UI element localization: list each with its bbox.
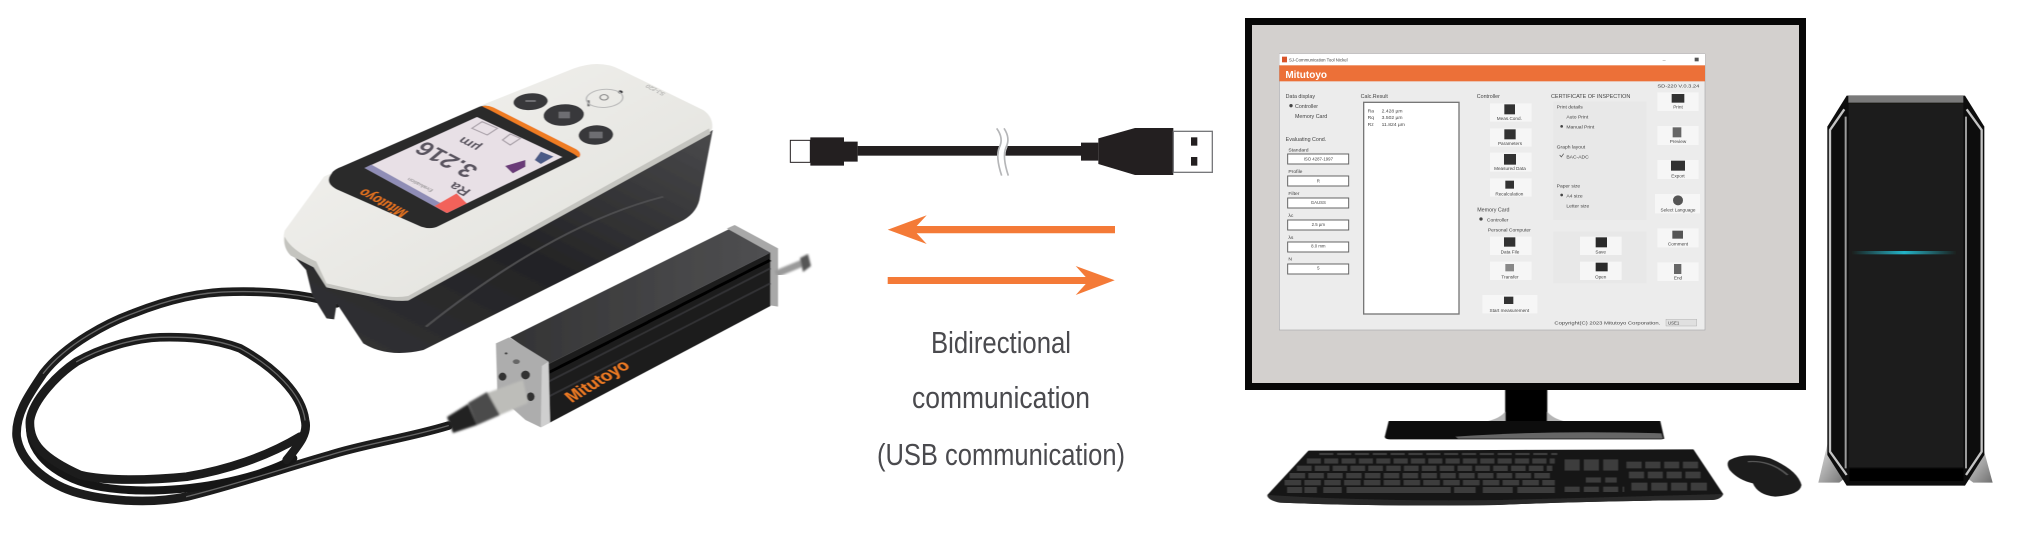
copyright line: Copyright(C) 2023 Mitutoyo Corporation. xyxy=(1554,321,1660,327)
left settings column: λc xyxy=(1288,213,1294,219)
ribbed strain relief xyxy=(447,404,477,433)
controller white top shell xyxy=(284,64,712,300)
USB cable xyxy=(790,128,1212,176)
certificate of inspection panel: Manual Print xyxy=(1566,125,1595,131)
detector rear plate xyxy=(727,225,778,307)
cable break mark xyxy=(997,128,1010,176)
tower shell xyxy=(1827,96,1984,486)
left settings column: 8.0 mm xyxy=(1311,244,1326,249)
model label: SJ-220 xyxy=(645,83,667,96)
calculation result panel: Rz xyxy=(1368,122,1374,128)
measuring unit: controller and detector xyxy=(284,64,778,427)
certificate of inspection panel: Paper size xyxy=(1557,184,1580,190)
calculation result panel: Calc.Result xyxy=(1361,94,1388,100)
right action buttons: Preview xyxy=(1670,139,1687,144)
copyright line xyxy=(1554,319,1697,327)
software window xyxy=(1279,54,1705,330)
arrow: computer to unit xyxy=(888,215,1115,244)
orange accent strip xyxy=(482,106,580,158)
left settings column: 2.5 µm xyxy=(1312,222,1325,227)
monitor stand xyxy=(1385,390,1664,439)
right action buttons xyxy=(1655,92,1700,281)
controller and memory card buttons: Transfer xyxy=(1501,274,1519,279)
controller and memory card buttons: Recalculation xyxy=(1495,191,1524,196)
PC tower xyxy=(1818,96,1993,486)
left settings column: Filter xyxy=(1288,191,1300,197)
controller buttons xyxy=(511,90,623,146)
calculation result panel xyxy=(1361,94,1459,314)
certificate of inspection panel: A4 size xyxy=(1566,194,1583,200)
silver collar xyxy=(487,380,528,415)
arrow: unit to computer xyxy=(888,266,1115,295)
computer monitor xyxy=(1245,18,1806,390)
controller and memory card buttons: Measured Data xyxy=(1494,166,1526,171)
left settings column: Controller xyxy=(1295,104,1318,110)
right action buttons: End xyxy=(1674,275,1683,280)
orange header with logo: Mitutoyo xyxy=(1285,70,1327,81)
tower teal light xyxy=(1852,251,1957,254)
controller and memory card buttons xyxy=(1477,94,1537,313)
left settings column: Profile xyxy=(1288,169,1303,175)
left settings column: R xyxy=(1317,178,1320,183)
save and open buttons: Save xyxy=(1595,249,1606,254)
calculation result panel: 3.502 µm xyxy=(1382,115,1403,121)
detector logo: Mitutoyo xyxy=(560,358,635,405)
calculation result panel: Ra xyxy=(1368,108,1374,114)
connection cable xyxy=(17,292,448,501)
strain relief xyxy=(1081,143,1098,161)
display screen with reading: 3.216 xyxy=(409,137,484,182)
USB-A plug housing xyxy=(1098,128,1173,175)
detector body xyxy=(510,229,770,423)
power button ring xyxy=(584,87,625,109)
controller logo: Mitutoyo xyxy=(355,186,412,219)
cable line xyxy=(858,146,1082,156)
left settings column: 5 xyxy=(1317,266,1320,271)
detector stylus tip xyxy=(776,254,811,274)
grey sleeve xyxy=(468,392,500,425)
controller and memory card buttons: Personal Computer xyxy=(1488,227,1531,233)
title bar: – xyxy=(1663,58,1666,64)
controller display bezel xyxy=(329,106,580,228)
certificate of inspection panel: CERTIFICATE OF INSPECTION xyxy=(1551,94,1630,100)
left settings column: Evaluating Cond. xyxy=(1286,137,1326,143)
left settings column: GAUSS xyxy=(1311,200,1326,205)
detector cable connector xyxy=(447,380,528,433)
detector front plate xyxy=(496,337,550,427)
controller and memory card buttons: Data File xyxy=(1501,249,1520,254)
left settings column: λs xyxy=(1288,235,1294,241)
controller and memory card buttons: Controller xyxy=(1487,217,1509,223)
display screen with reading: µm xyxy=(455,135,484,153)
right action buttons: Print xyxy=(1673,105,1683,110)
certificate of inspection panel: BAC-ADC xyxy=(1566,154,1589,160)
tower silver trim xyxy=(1830,109,1982,475)
calculation result panel: 2.428 µm xyxy=(1382,108,1403,114)
caption text xyxy=(877,325,1125,472)
calculation result panel: Rq xyxy=(1368,115,1374,121)
small connector housing xyxy=(810,137,858,166)
monitor screen xyxy=(1252,25,1799,383)
right action buttons: Comment xyxy=(1668,241,1689,246)
caption text: communication xyxy=(912,380,1090,415)
controller and memory card buttons: Memory Card xyxy=(1477,207,1509,213)
controller base xyxy=(288,130,713,353)
window body xyxy=(1279,54,1705,330)
certificate of inspection panel: Auto Print xyxy=(1566,115,1589,121)
save and open buttons: Open xyxy=(1595,274,1607,279)
keyboard xyxy=(1267,449,1723,505)
USB-A metal shell xyxy=(1173,131,1212,172)
display screen with reading: Ra xyxy=(445,179,475,198)
right action buttons: Select Language xyxy=(1661,207,1696,212)
certificate of inspection panel xyxy=(1551,94,1647,220)
tower bottom recess xyxy=(1849,468,1963,481)
display screen with reading: Evaluation xyxy=(406,176,435,192)
title bar: SJ-Communication Tool Nickel xyxy=(1289,57,1348,62)
save and open buttons xyxy=(1553,232,1647,283)
controller and memory card buttons: Controller xyxy=(1477,94,1500,100)
caption text: (USB communication) xyxy=(877,437,1125,472)
version label: SD-220 V.0.3.24 xyxy=(1657,83,1700,89)
display screen with reading xyxy=(365,117,562,213)
certificate of inspection panel: Print details xyxy=(1557,105,1583,111)
tower front panel xyxy=(1849,103,1963,467)
title bar xyxy=(1279,54,1705,65)
left settings column: Standard xyxy=(1288,147,1309,153)
tower top strip xyxy=(1848,96,1963,103)
USB-C tip xyxy=(790,140,810,162)
copyright line: USE1 xyxy=(1668,320,1680,325)
mouse xyxy=(1728,455,1801,497)
certificate of inspection panel: Graph layout xyxy=(1557,144,1586,150)
orange header with logo xyxy=(1279,65,1705,81)
left settings column: Data display xyxy=(1286,94,1315,100)
controller and memory card buttons: Meas.Cond. xyxy=(1497,116,1522,121)
right action buttons: Export xyxy=(1671,173,1685,178)
monitor bezel xyxy=(1245,18,1806,390)
left settings column: ISO 4287-1997 xyxy=(1304,156,1334,161)
caption text: Bidirectional xyxy=(931,325,1071,360)
calculation result panel: 11.824 µm xyxy=(1382,122,1405,128)
controller and memory card buttons: Parameters xyxy=(1498,141,1523,146)
certificate of inspection panel: Letter size xyxy=(1566,204,1590,210)
left settings column: Memory Card xyxy=(1295,114,1327,120)
left settings column: N xyxy=(1288,257,1292,263)
controller and memory card buttons: Start measurement xyxy=(1490,308,1530,313)
tower feet xyxy=(1818,442,1993,483)
left settings column xyxy=(1286,94,1349,274)
